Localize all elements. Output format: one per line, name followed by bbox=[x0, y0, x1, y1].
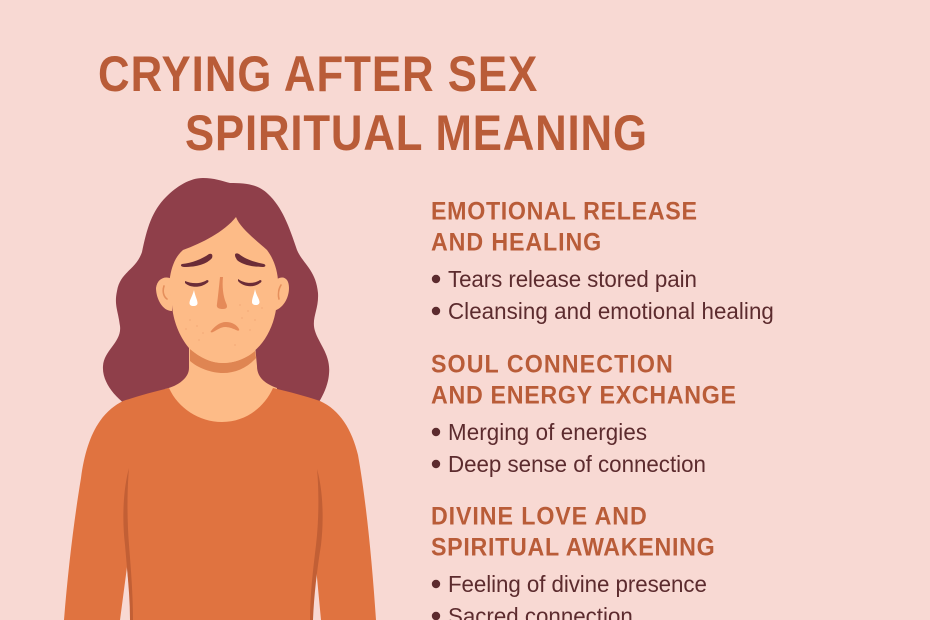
bullet list: Feeling of divine presence bbox=[448, 570, 707, 597]
face bbox=[170, 217, 278, 363]
freckles bbox=[185, 304, 263, 346]
heading: SPIRITUAL AWAKENING bbox=[431, 534, 715, 562]
neck shadow bbox=[190, 349, 256, 373]
section: soul connection and energy exchange bbox=[431, 351, 736, 477]
heading: DIVINE LOVE AND bbox=[431, 503, 647, 531]
shirt bbox=[64, 388, 376, 620]
heading bbox=[431, 198, 697, 257]
shirt folds bbox=[123, 468, 133, 620]
illustration: crying woman bbox=[64, 178, 376, 620]
heading: AND ENERGY EXCHANGE bbox=[431, 382, 736, 410]
bullet list bbox=[432, 265, 774, 324]
heading: EMOTIONAL RELEASE bbox=[431, 198, 697, 226]
bullet list bbox=[432, 418, 706, 477]
title: SPIRITUAL MEANING bbox=[185, 104, 647, 161]
bullet list: Tears release stored pain bbox=[448, 265, 697, 292]
title bbox=[98, 45, 647, 161]
heading bbox=[431, 351, 736, 410]
tears bbox=[190, 290, 198, 306]
bullet list: Cleansing and emotional healing bbox=[448, 297, 774, 324]
mouth bbox=[211, 322, 239, 332]
nose bbox=[217, 277, 227, 309]
heading: SOUL CONNECTION bbox=[431, 351, 673, 379]
neck bbox=[165, 345, 277, 430]
section: emotional release and healing bbox=[431, 198, 774, 324]
title: CRYING AFTER SEX bbox=[98, 45, 537, 102]
closed eyes bbox=[185, 280, 208, 287]
heading bbox=[431, 503, 715, 562]
bullet list bbox=[432, 570, 707, 620]
eyebrows bbox=[181, 254, 212, 267]
heading: AND HEALING bbox=[431, 229, 601, 257]
ears bbox=[156, 277, 172, 311]
bullet list: Merging of energies bbox=[448, 418, 647, 445]
hair bbox=[103, 178, 329, 404]
bullet list: Deep sense of connection bbox=[448, 450, 706, 477]
section: divine love and spiritual awakening bbox=[431, 503, 715, 620]
